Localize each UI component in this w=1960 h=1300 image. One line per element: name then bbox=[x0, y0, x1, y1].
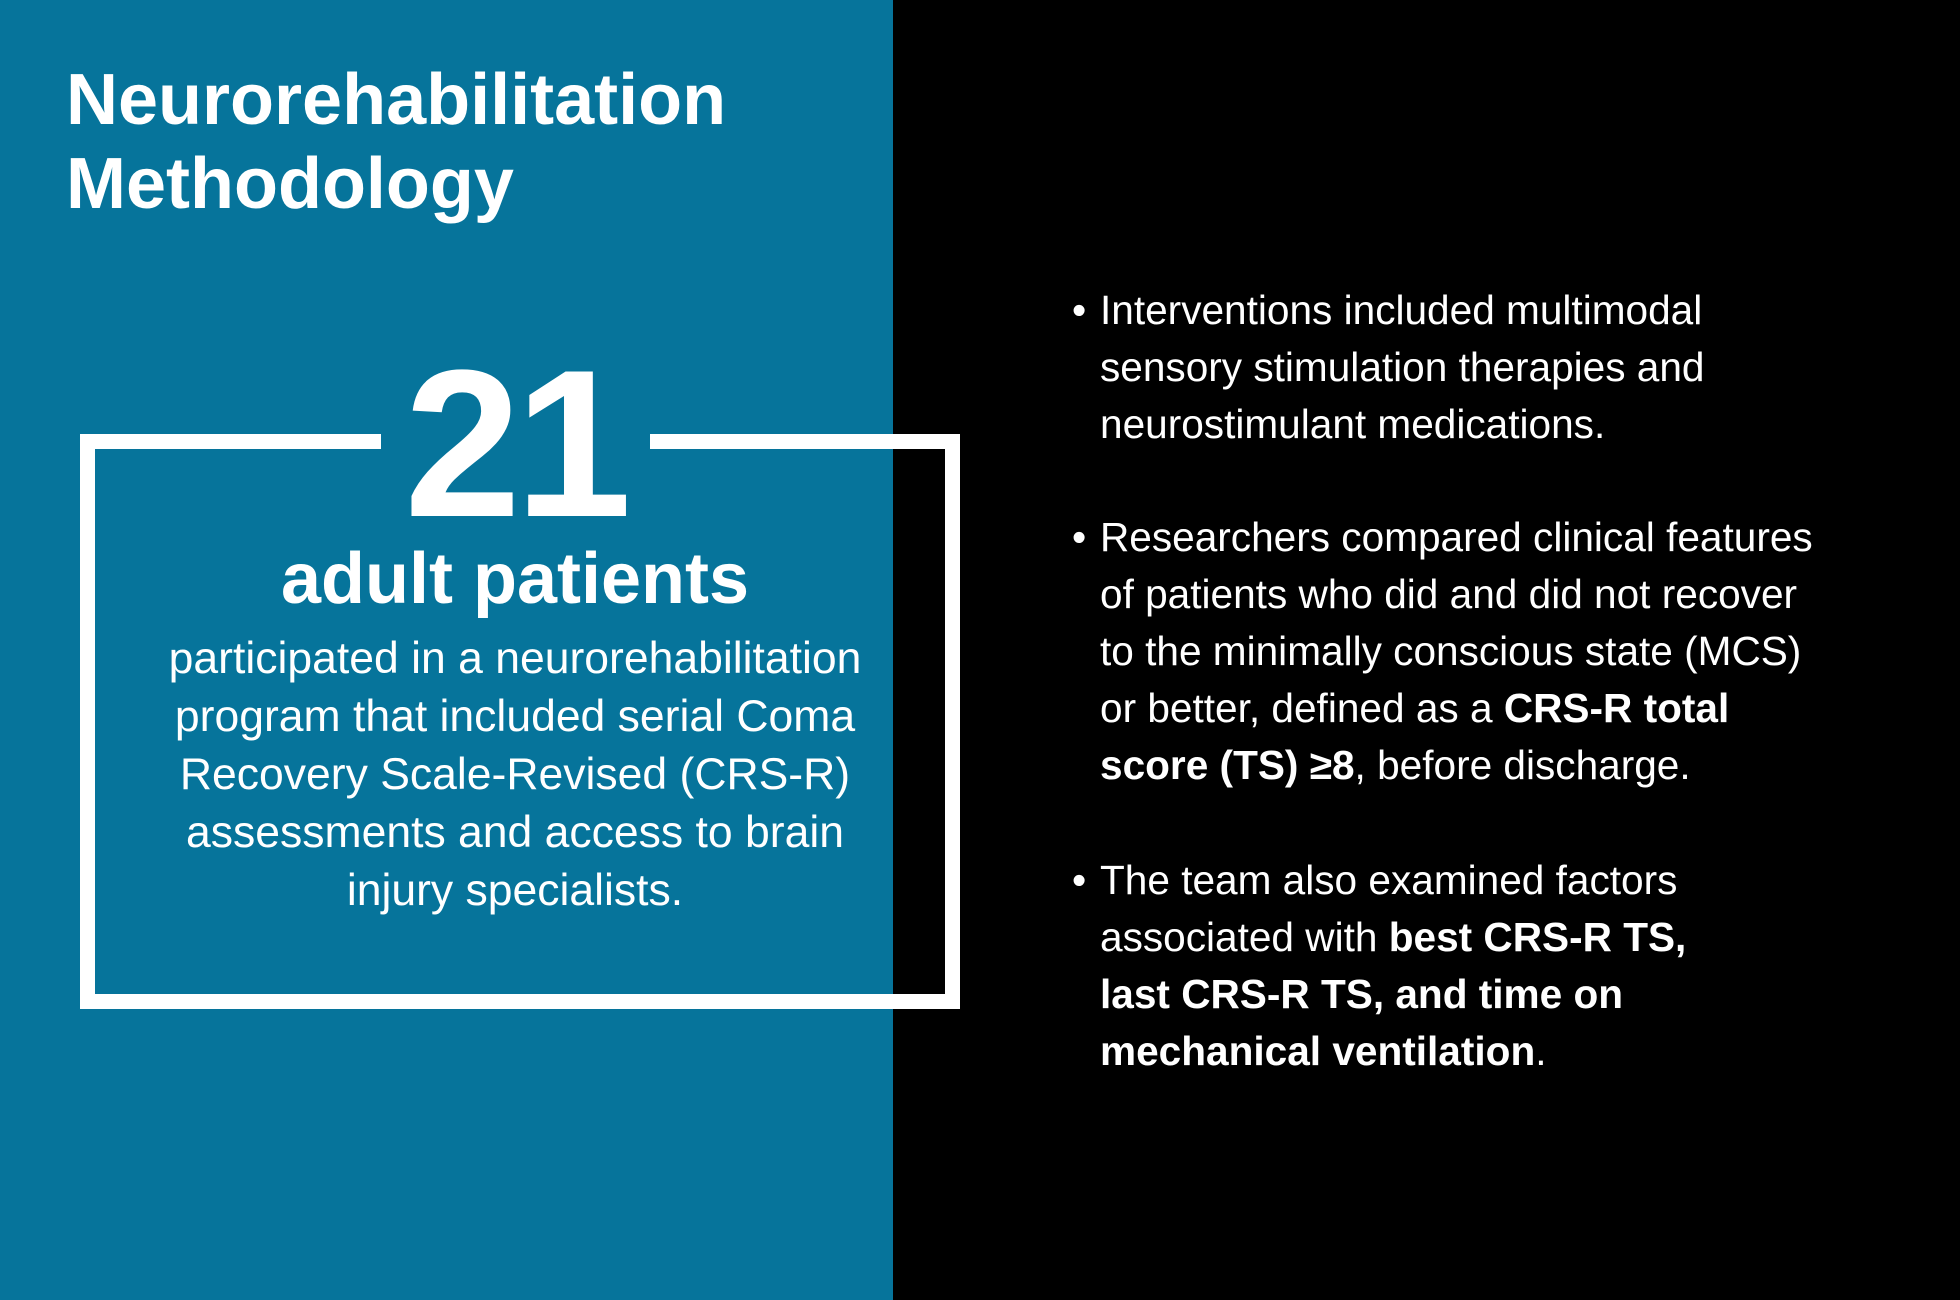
bullet: researchers compared: to the minimally conscious state (MCS) bbox=[1100, 628, 1801, 674]
bullet: interventions bbox=[1072, 287, 1704, 447]
bullet: factors examined: associated with best CRS-R TS, bbox=[1100, 914, 1686, 960]
bullet: factors examined: • bbox=[1072, 857, 1086, 903]
title: Methodology bbox=[66, 144, 514, 224]
bullet: researchers compared: or better, defined as a CRS-R total bbox=[1100, 685, 1729, 731]
text block: program description: assessments and access to brain bbox=[186, 808, 844, 857]
heading: adult patients: adult patients bbox=[281, 539, 749, 619]
bullet: interventions: • bbox=[1072, 287, 1086, 333]
panel: blue left background bbox=[0, 0, 893, 1300]
bullet: researchers compared: of patients who did and did not recover bbox=[1100, 571, 1797, 617]
big number 21: 21 bbox=[404, 326, 626, 561]
title: Neurorehabilitation bbox=[66, 60, 726, 140]
bullet: factors examined: The team also examined factors bbox=[1100, 857, 1677, 903]
bullet: factors examined: last CRS-R TS, and time on bbox=[1100, 971, 1623, 1017]
bullet: interventions: Interventions included multimodal bbox=[1100, 287, 1702, 333]
bullet: researchers compared: • bbox=[1072, 514, 1086, 560]
bullet: interventions: sensory stimulation therapies and bbox=[1100, 344, 1704, 390]
bullet: factors examined: mechanical ventilation. bbox=[1100, 1028, 1547, 1074]
bullet: researchers compared: Researchers compared clinical features bbox=[1100, 514, 1813, 560]
text block: program description: participated in a neurorehabilitation bbox=[169, 634, 861, 683]
bullet: researchers compared: score (TS) ≥8, before discharge. bbox=[1100, 742, 1691, 788]
title bbox=[66, 60, 726, 224]
text block: program description: program that included serial Coma bbox=[175, 692, 855, 741]
text block: program description bbox=[169, 634, 861, 915]
text block: program description: injury specialists. bbox=[347, 866, 683, 915]
bullet: researchers compared bbox=[1072, 514, 1813, 788]
text block: program description: Recovery Scale-Revised (CRS-R) bbox=[180, 750, 850, 799]
bullet: factors examined bbox=[1072, 857, 1686, 1074]
panel: outlined stat box bbox=[80, 434, 960, 1009]
border gap behind number bbox=[381, 425, 650, 460]
bullet: interventions: neurostimulant medications. bbox=[1100, 401, 1605, 447]
